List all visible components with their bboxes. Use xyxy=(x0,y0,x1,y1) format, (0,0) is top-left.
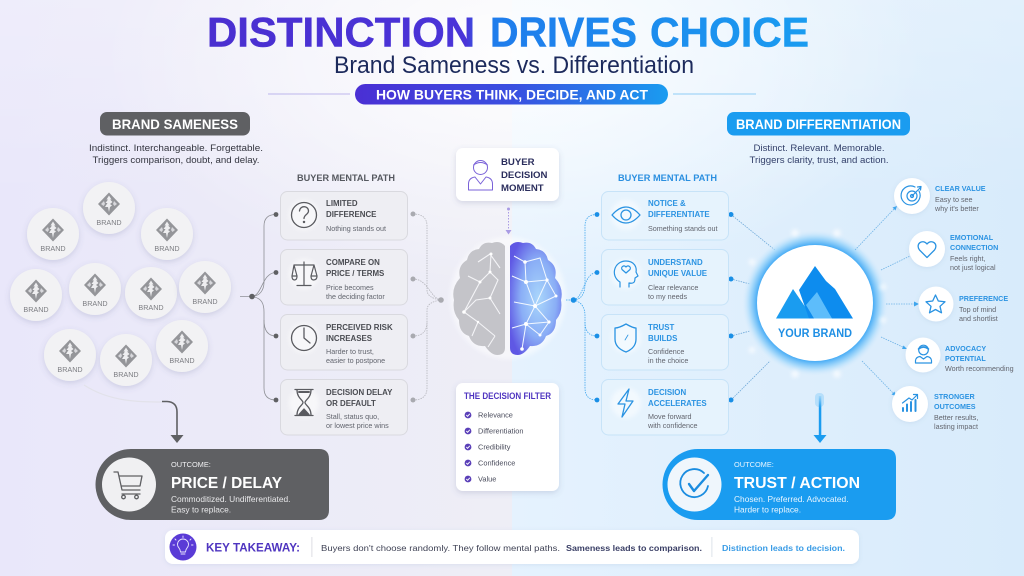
panel: buyer decision moment xyxy=(456,148,559,201)
checklist: Relevance xyxy=(478,410,513,420)
key takeaway bar: Sameness leads to comparison. xyxy=(566,543,702,553)
panel: decision accelerates: ACCELERATES xyxy=(648,399,707,408)
icon: eye xyxy=(612,207,640,223)
panel: trust builds: in the choice xyxy=(648,356,688,365)
spokes: brand to benefits xyxy=(855,206,919,396)
benefit: preference: Top of mind xyxy=(959,305,996,314)
connectors: left mental path xyxy=(240,212,444,402)
brand badge: BRAND xyxy=(138,303,164,312)
cluster: interchangeable brand badges xyxy=(10,182,231,386)
panel: outcome price / delay xyxy=(95,449,329,520)
benefit: advocacy potential: POTENTIAL xyxy=(945,354,986,363)
heading: brand differentiation: BRAND DIFFERENTIATION xyxy=(736,116,901,132)
icon: shopping cart xyxy=(114,472,142,499)
panel: notice and differentiate: NOTICE & xyxy=(648,199,686,208)
brand badge: BRAND xyxy=(169,356,195,365)
panel: outcome price / delay: Commoditized. Undifferentiated. xyxy=(171,494,290,504)
key takeaway bar xyxy=(165,530,859,564)
panel: outcome trust / action xyxy=(662,449,896,520)
panel: perceived risk: easier to postpone xyxy=(326,356,385,365)
text: sameness description: Indistinct. Interchangeable. Forgettable. xyxy=(89,143,263,154)
text: sameness description: Triggers comparison, doubt, and delay. xyxy=(92,155,260,166)
benefit: emotional connection: CONNECTION xyxy=(950,243,998,252)
panel: trust builds xyxy=(602,314,728,370)
panel: buyer decision moment: BUYER xyxy=(501,157,535,168)
panel: compare on price: COMPARE ON xyxy=(326,258,380,267)
panel: decision accelerates: with confidence xyxy=(647,421,698,430)
heading: brand sameness xyxy=(100,112,250,136)
checklist: Differentiation xyxy=(478,426,523,436)
arrow: moment to brain xyxy=(506,208,512,234)
panel: limited difference: Nothing stands out xyxy=(326,224,386,233)
brain illustration xyxy=(450,237,566,359)
title: DISTINCTION xyxy=(207,8,475,56)
benefit: clear value: CLEAR VALUE xyxy=(935,184,986,193)
text: differentiation description xyxy=(750,143,888,166)
benefit: stronger outcomes xyxy=(892,386,978,431)
key takeaway bar: KEY TAKEAWAY: xyxy=(206,540,300,554)
title xyxy=(207,8,809,56)
panel: perceived risk: INCREASES xyxy=(326,334,372,343)
panel: outcome trust / action: TRUST / ACTION xyxy=(734,475,860,492)
benefit: emotional connection xyxy=(909,231,998,272)
benefit: clear value: why it's better xyxy=(934,204,979,213)
brand badge xyxy=(100,334,152,386)
left hemisphere: grey xyxy=(453,242,505,355)
panel: limited difference: LIMITED xyxy=(326,199,358,208)
title: CHOICE xyxy=(650,8,809,56)
icon: balance scale xyxy=(292,262,317,286)
checklist: Value xyxy=(478,474,496,484)
brand badge xyxy=(27,208,79,260)
panel: compare on price: Price becomes xyxy=(326,283,374,292)
brand badge xyxy=(10,269,62,321)
icon: question mark xyxy=(292,202,316,228)
benefit: stronger outcomes: STRONGER xyxy=(934,392,976,401)
title: DRIVES xyxy=(490,8,637,56)
benefit: preference: PREFERENCE xyxy=(959,294,1008,303)
icon: shield xyxy=(615,324,636,352)
panel: decision delay xyxy=(280,380,408,435)
panel: notice and differentiate: DIFFERENTIATE xyxy=(648,210,710,219)
panel: buyer decision moment: DECISION xyxy=(501,170,547,181)
checklist: Confidence xyxy=(478,458,515,468)
panel: decision accelerates xyxy=(602,380,728,435)
panel: understand unique value: UNIQUE VALUE xyxy=(648,269,707,278)
brand badge: BRAND xyxy=(23,305,49,314)
panel: outcome trust / action: OUTCOME: xyxy=(734,460,774,469)
heading: brand differentiation xyxy=(727,112,910,136)
panel: compare on price: PRICE / TERMS xyxy=(326,269,384,278)
panel: perceived risk xyxy=(280,314,408,370)
heading: left buyer mental path: BUYER MENTAL PATH xyxy=(297,173,395,184)
icon: light bulb xyxy=(170,534,196,560)
panel: decision delay: OR DEFAULT xyxy=(326,399,376,408)
benefit: advocacy potential: Worth recommending xyxy=(945,364,1014,373)
panel: compare on price: the deciding factor xyxy=(326,292,385,301)
panel: outcome price / delay: Easy to replace. xyxy=(171,504,231,514)
benefit: clear value: Easy to see xyxy=(935,195,973,204)
your brand hub xyxy=(742,230,888,378)
benefit: preference xyxy=(918,286,1008,323)
panel: trust builds: Confidence xyxy=(648,347,684,356)
panel: the decision filter: THE DECISION FILTER xyxy=(464,390,551,401)
icon: buyer xyxy=(468,160,492,190)
benefit: stronger outcomes: Better results, xyxy=(934,413,978,422)
panel: outcome price / delay: OUTCOME: xyxy=(171,460,211,469)
brand badge xyxy=(44,329,96,381)
icon: heart xyxy=(918,242,936,258)
icon: growth chart xyxy=(902,394,918,411)
panel: perceived risk: PERCEIVED RISK xyxy=(326,323,393,332)
key takeaway bar: Distinction leads to decision. xyxy=(722,543,845,553)
panel: understand unique value: to my needs xyxy=(648,292,688,301)
arrow: brand to outcome xyxy=(814,393,826,443)
panel: limited difference xyxy=(280,192,408,240)
panel: understand unique value xyxy=(602,250,728,305)
brand badge: BRAND xyxy=(57,365,83,374)
benefit: advocacy potential xyxy=(906,338,1014,373)
panel: notice and differentiate: Something stands out xyxy=(648,224,718,233)
panel: decision delay: DECISION DELAY xyxy=(326,388,393,397)
panel: decision delay: Stall, status quo, xyxy=(326,412,379,421)
brand badge: BRAND xyxy=(113,370,139,379)
benefit: preference: and shortlist xyxy=(959,314,998,323)
right hemisphere: blue network xyxy=(510,242,562,355)
benefit: emotional connection: Feels right, xyxy=(950,254,986,263)
brand badge xyxy=(141,208,193,260)
text: differentiation description: Distinct. Relevant. Memorable. xyxy=(754,143,884,154)
icon: lightning bolt xyxy=(618,389,633,417)
panel: trust builds: TRUST xyxy=(648,323,674,332)
icon: clock xyxy=(292,326,316,350)
text: differentiation description: Triggers clarity, trust, and action. xyxy=(750,155,888,166)
brand badge: BRAND xyxy=(154,244,180,253)
panel: understand unique value: UNDERSTAND xyxy=(648,258,703,267)
benefit: emotional connection: EMOTIONAL xyxy=(950,233,994,242)
your brand hub: YOUR BRAND xyxy=(778,328,852,340)
panel: buyer decision moment: MOMENT xyxy=(501,183,544,194)
brand badge xyxy=(69,263,121,315)
brand badge xyxy=(83,182,135,234)
checklist xyxy=(465,410,523,484)
benefit: clear value xyxy=(894,178,986,214)
icon: person xyxy=(916,345,932,363)
icon: check in circle xyxy=(680,469,708,497)
icon: mountain logo xyxy=(776,266,853,318)
arrow: sameness to outcome xyxy=(84,385,184,443)
brand badge: BRAND xyxy=(40,244,66,253)
panel: outcome trust / action: Harder to replace. xyxy=(734,504,801,514)
panel: trust builds: BUILDS xyxy=(648,334,677,343)
heading: right buyer mental path: BUYER MENTAL PATH xyxy=(618,173,717,184)
panel: limited difference: DIFFERENCE xyxy=(326,210,376,219)
panel: decision delay: or lowest price wins xyxy=(326,421,389,430)
panel: decision accelerates: DECISION xyxy=(648,388,686,397)
banner: how buyers think: HOW BUYERS THINK, DECIDE, AND ACT xyxy=(376,88,649,102)
text: sameness description xyxy=(89,143,263,166)
brand badge: BRAND xyxy=(192,297,218,306)
brand badge xyxy=(179,261,231,313)
panel: notice and differentiate xyxy=(602,192,728,240)
benefit: stronger outcomes: OUTCOMES xyxy=(934,402,976,411)
panel: perceived risk: Harder to trust, xyxy=(326,347,374,356)
banner: how buyers think xyxy=(268,84,756,104)
benefit: emotional connection: not just logical xyxy=(950,263,996,272)
brand badge: BRAND xyxy=(96,218,122,227)
heading: brand sameness: BRAND SAMENESS xyxy=(112,116,238,132)
panel: understand unique value: Clear relevance xyxy=(648,283,698,292)
checklist: Credibility xyxy=(478,442,511,452)
connectors: right mental path xyxy=(566,212,775,402)
panel: compare on price xyxy=(280,250,408,305)
panel: the decision filter xyxy=(456,383,559,491)
panel: outcome price / delay: PRICE / DELAY xyxy=(171,475,282,492)
panel: decision accelerates: Move forward xyxy=(648,412,692,421)
icon: head with heart xyxy=(614,261,638,287)
panel: outcome trust / action: Chosen. Preferred. Advocated. xyxy=(734,494,849,504)
benefit: stronger outcomes: lasting impact xyxy=(934,422,978,431)
brand badge: BRAND xyxy=(82,299,108,308)
icon: target xyxy=(901,186,921,205)
benefit: advocacy potential: ADVOCACY xyxy=(945,344,986,353)
brand badge xyxy=(125,267,177,319)
brand badge xyxy=(156,320,208,372)
icon: hourglass xyxy=(295,390,313,416)
icon: star xyxy=(926,295,945,313)
subtitle: Brand Sameness vs. Differentiation xyxy=(334,52,694,79)
key takeaway bar: Buyers don't choose randomly. They follow mental paths. xyxy=(321,543,560,553)
